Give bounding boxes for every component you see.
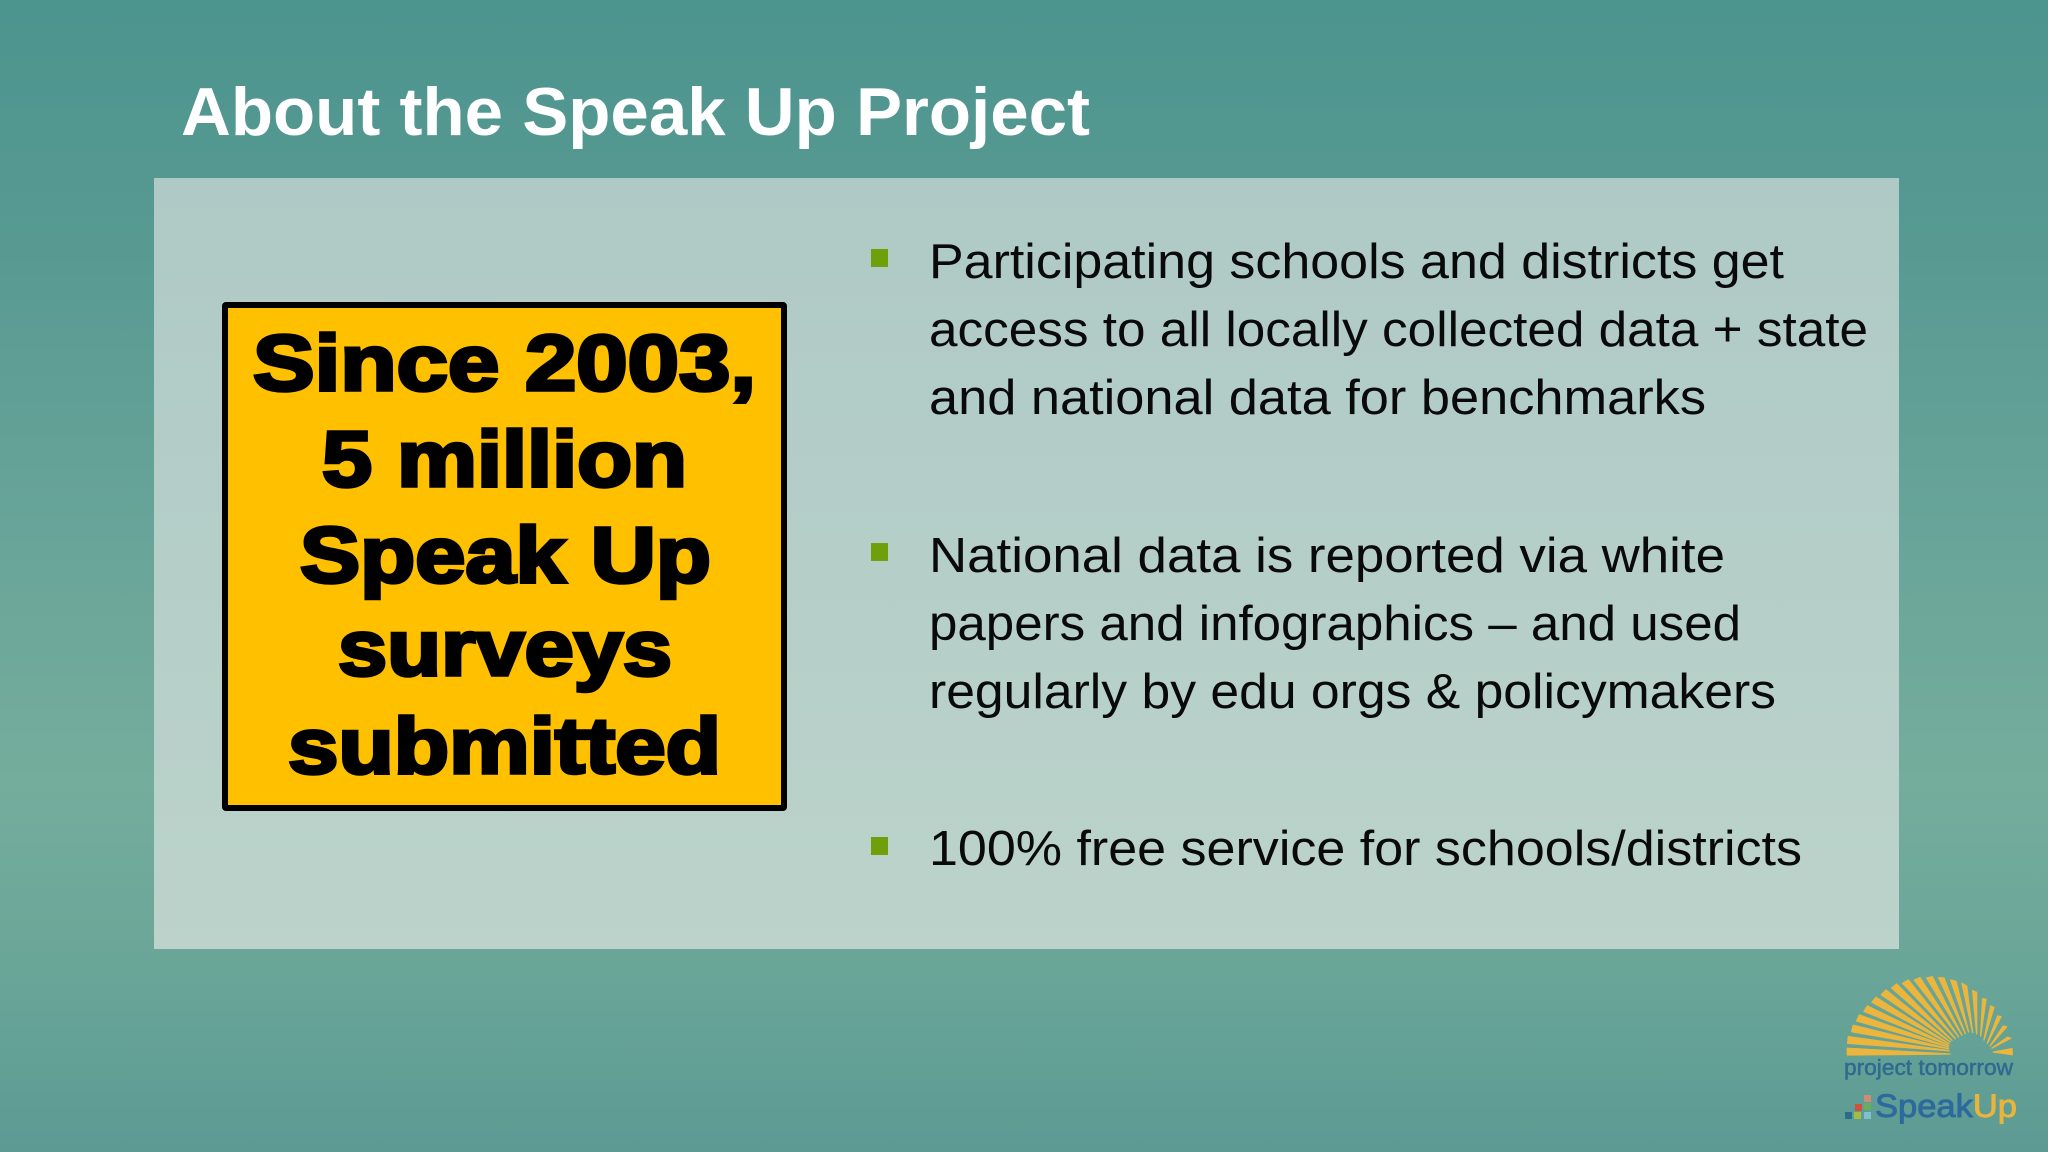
callout: survey count: 5 million (322, 414, 687, 503)
callout: survey count (225, 305, 784, 808)
logo text: project tomorrow: project tomorrow (1844, 1055, 2013, 1080)
panel: content background (154, 178, 1899, 949)
bullet: local data access: access to all locally collected data + state (929, 303, 1868, 357)
bullet: national data: regularly by edu orgs & policymakers (929, 665, 1776, 719)
logo text: SpeakUp: SpeakUp (1875, 1088, 2017, 1124)
bullet: national data: papers and infographics – and used (929, 597, 1741, 651)
bullet: national data: National data is reported via white (929, 529, 1725, 583)
title: About the Speak Up Project (181, 74, 1090, 150)
bullet: local data access: Participating schools and districts get (929, 235, 1784, 289)
icon: coloured squares (1845, 1095, 1871, 1119)
callout: survey count: submitted (288, 701, 721, 790)
callout: survey count: Speak Up (300, 510, 711, 599)
bullet: local data access: and national data for benchmarks (929, 371, 1706, 425)
bullet: local data access (871, 235, 1868, 425)
icon: sun rays (1847, 977, 2012, 1055)
bullet: national data (871, 529, 1776, 719)
bullet: free service: 100% free service for schools/districts (929, 822, 1802, 876)
callout: survey count: surveys (338, 603, 672, 692)
callout: survey count: Since 2003, (253, 318, 756, 407)
logo: project tomorrow and Speak Up (1844, 977, 2017, 1124)
